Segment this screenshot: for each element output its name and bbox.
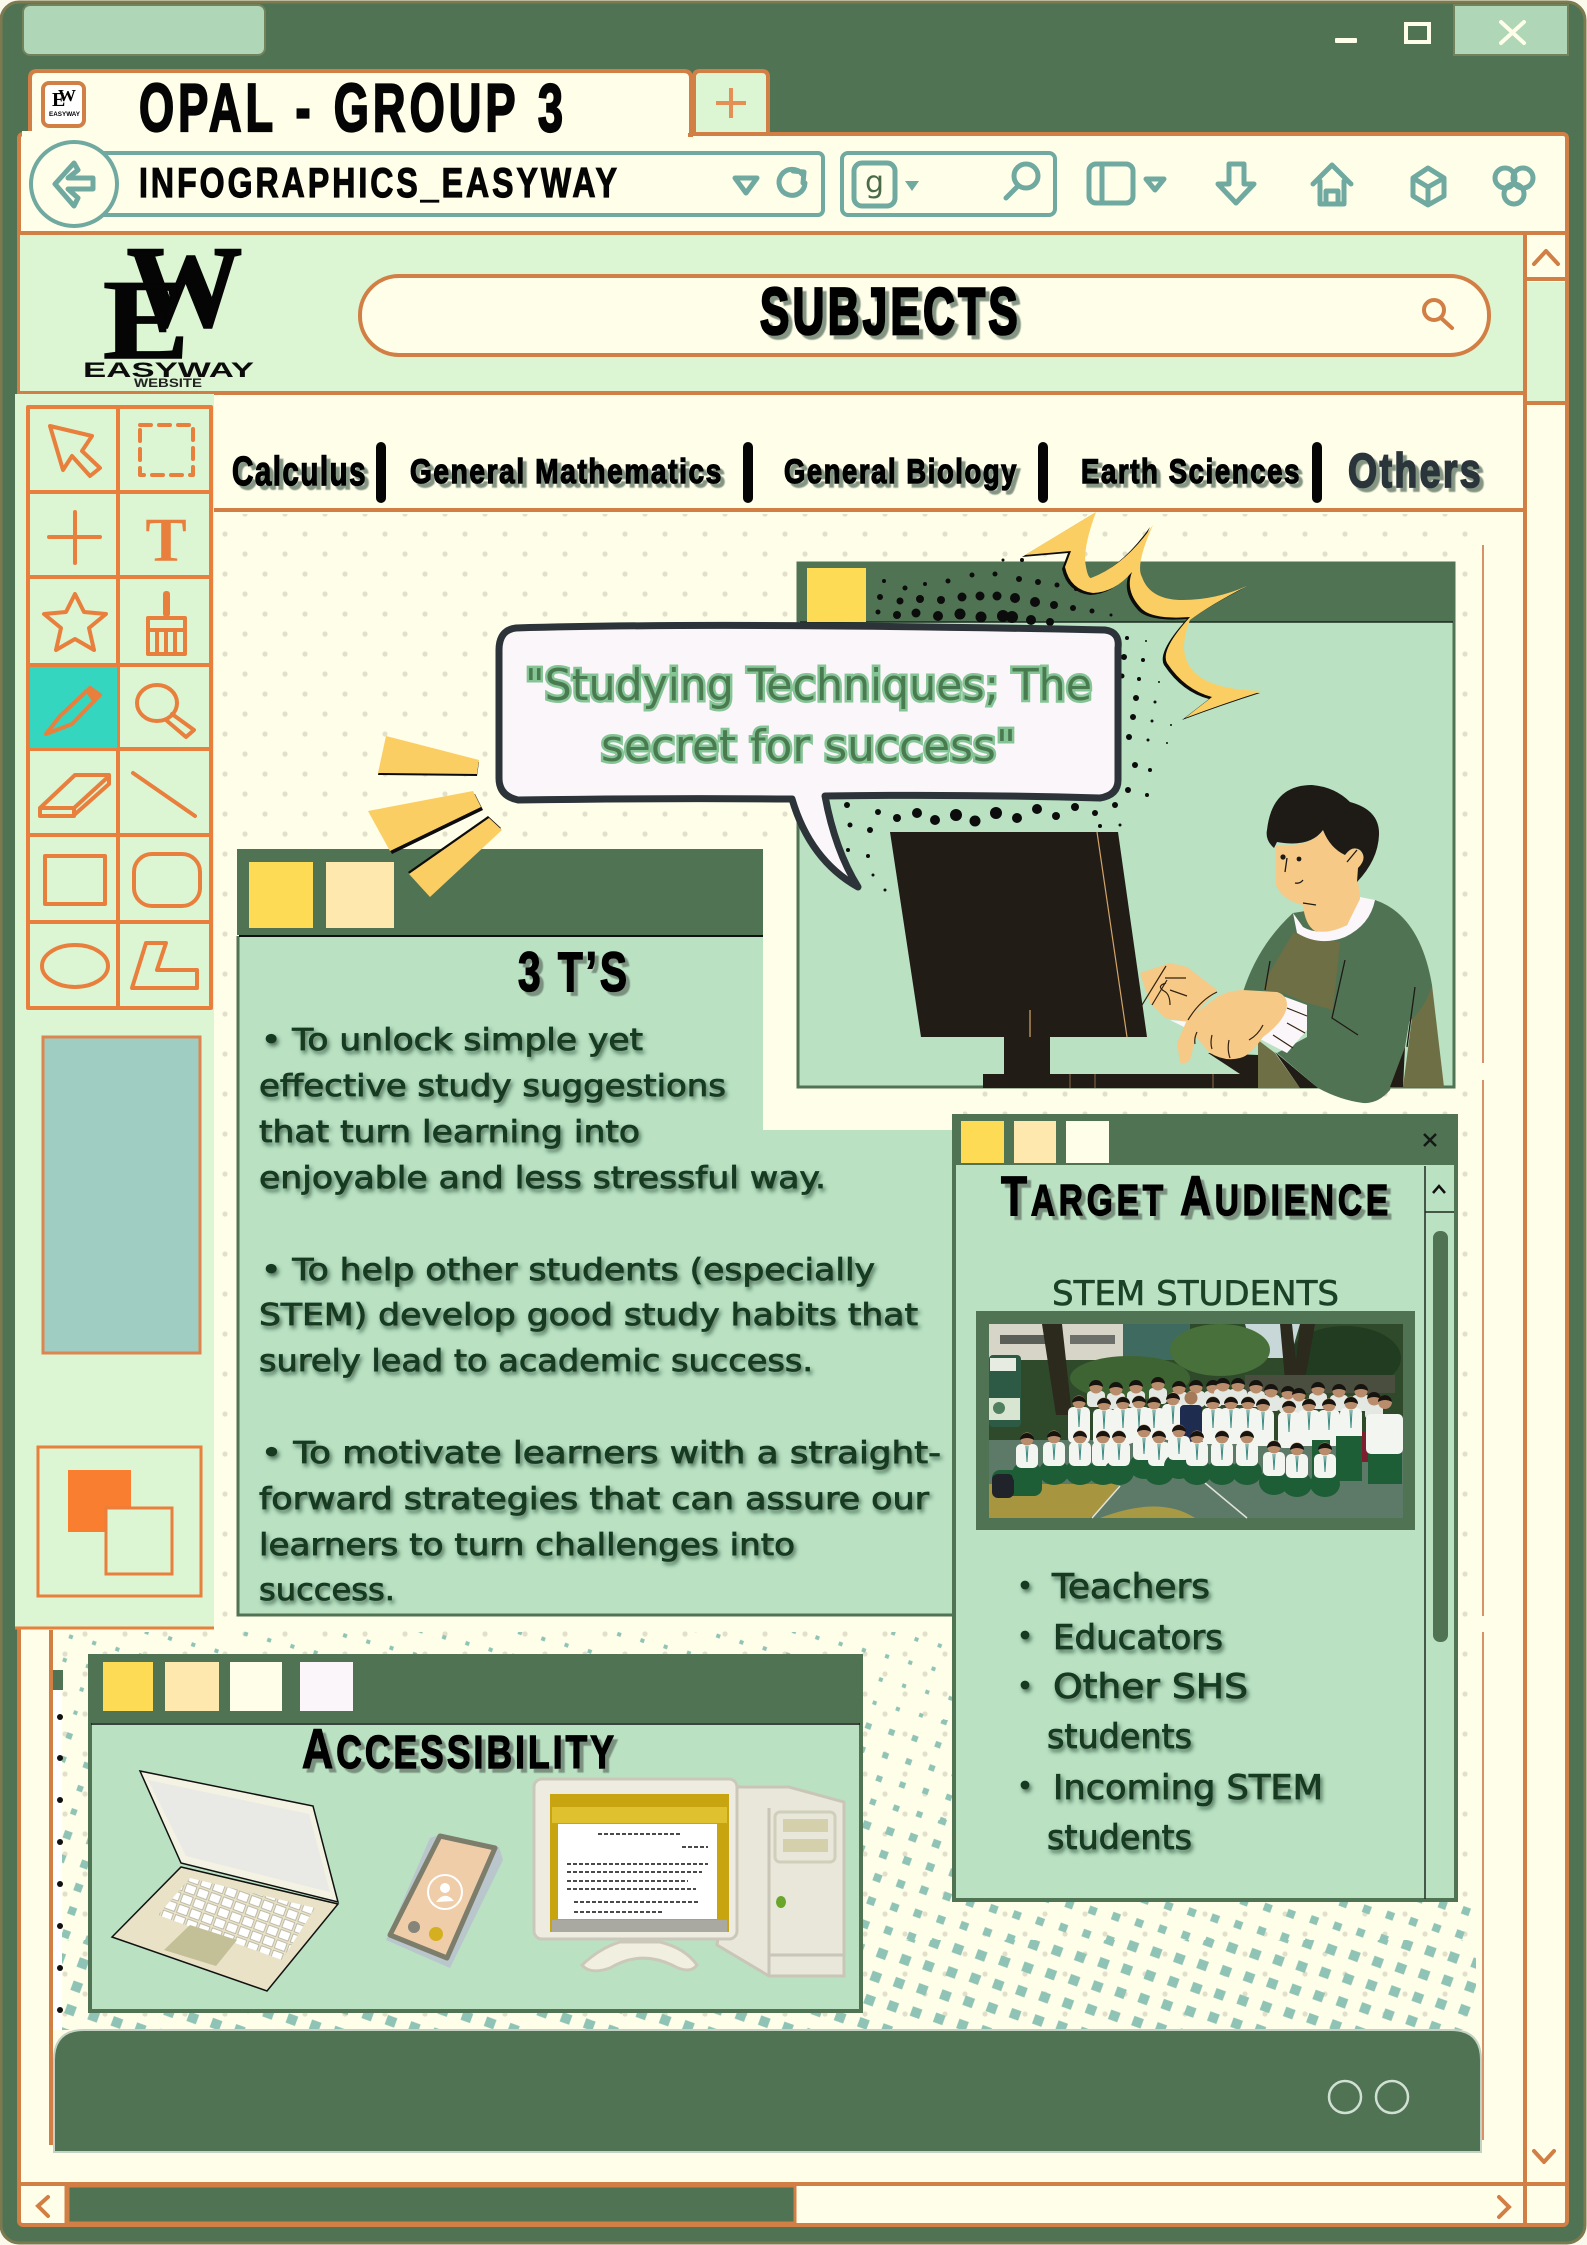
nav: general mathematics: General Mathematics (410, 453, 723, 491)
subject navigation (214, 442, 1525, 510)
scroll down arrow (1534, 2151, 1554, 2162)
icon: crosshair (49, 512, 100, 563)
audience list (1021, 1567, 1323, 1858)
logo: EASYWAY (83, 359, 254, 382)
icon: magnifier (137, 685, 194, 737)
search engine box: g (865, 165, 884, 200)
scroll left arrow (38, 2197, 48, 2216)
favicon (43, 83, 84, 126)
sidebar icon (1089, 164, 1164, 203)
patterned content background (51, 514, 1483, 2145)
logo: W (127, 224, 242, 352)
favicon: W (58, 86, 76, 105)
address bar (31, 142, 823, 226)
icon: L polygon (132, 943, 197, 988)
student standing at right (1366, 1395, 1403, 1484)
minimize button (1335, 38, 1357, 43)
logo: E (103, 256, 189, 383)
icon: rounded rectangle (134, 854, 200, 906)
logo: WEBSITE (134, 376, 202, 390)
panel: computer user window (798, 558, 1454, 1103)
icon: text tool: T (145, 507, 187, 575)
yellow accent wedges (368, 736, 502, 897)
footer bar (54, 2030, 1481, 2152)
heading: subjects: SUBJECTS (760, 274, 1021, 348)
search bar (360, 274, 1489, 355)
nav: earth sciences: Earth Sciences (1081, 453, 1301, 491)
maximize button (1406, 24, 1429, 42)
heading: 3 T's: 3 T’S (518, 940, 630, 1003)
cream area between windows (763, 849, 963, 1134)
foreground and background colours (38, 1447, 201, 1596)
top left title button (23, 5, 265, 55)
toolbar icons (1089, 164, 1533, 205)
tool panel (15, 394, 214, 1628)
yellow burst top right (1022, 512, 1263, 720)
icon: eraser (40, 775, 109, 816)
active tool highlight (30, 667, 117, 748)
heading: accessibility: ACCESSIBILITY (302, 1717, 617, 1780)
students back row (1087, 1377, 1383, 1419)
window buttons (961, 1121, 1109, 1163)
close button (1454, 5, 1568, 55)
body text: enjoyable and less stressful way. (259, 1161, 826, 1196)
bubble quote text: secret for success" (601, 721, 1016, 772)
bubble quote text: "Studying Techniques; The (525, 660, 1092, 711)
audience list: students (1047, 1717, 1192, 1757)
illustration: desktop computer (534, 1779, 844, 1976)
favicon: EASYWAY (49, 112, 80, 118)
home icon (1313, 165, 1351, 204)
body text: that turn learning into (259, 1115, 640, 1150)
dropdown triangle (735, 178, 757, 193)
icon: arrow (50, 426, 100, 476)
icon: star (44, 594, 106, 650)
icon: marquee (140, 425, 193, 475)
illustration: laptop (112, 1771, 338, 1991)
body text: • To unlock simple yet (261, 1023, 643, 1058)
back button (31, 142, 117, 226)
audience list: Teachers (1051, 1567, 1210, 1607)
icon: ellipse (42, 945, 108, 987)
body text: • To help other students (especially (261, 1253, 875, 1288)
logo (83, 224, 254, 390)
scrollbar (1425, 1166, 1454, 1899)
body text: • To motivate learners with a straight- (261, 1436, 941, 1471)
new tab button (694, 71, 768, 134)
panel: target audience (953, 1115, 1456, 1900)
nav: calculus: Calculus (232, 448, 367, 494)
icon: pencil (46, 687, 100, 734)
window buttons (249, 862, 394, 928)
colour swatch panel (43, 1037, 200, 1353)
body text: effective study suggestions (259, 1069, 726, 1104)
students front row (992, 1424, 1340, 1498)
students middle row (1068, 1392, 1403, 1484)
tool grid (28, 407, 211, 1008)
scroll right arrow (1499, 2197, 1509, 2217)
title bar (23, 5, 1568, 55)
illustration: monitor (890, 832, 1275, 1088)
horizontal scrollbar (18, 2184, 1566, 2224)
bubble quote text (525, 660, 1092, 772)
speech bubble (499, 625, 1118, 887)
browser tab (22, 70, 691, 146)
photo background (989, 1324, 1403, 1518)
panel: 3 T's (237, 849, 955, 1615)
search icon (1424, 300, 1452, 328)
nav: others: Others (1348, 445, 1483, 498)
body text: forward strategies that can assure our (259, 1482, 930, 1517)
audience list: students (1047, 1818, 1192, 1858)
refresh icon (779, 169, 805, 195)
nav: general biology: General Biology (784, 453, 1018, 491)
audience list: Educators (1053, 1618, 1223, 1658)
heading: target audience: TARGET AUDIENCE (1001, 1164, 1392, 1227)
body text (259, 1023, 941, 1608)
favicon: E (52, 89, 65, 111)
close icon (1424, 1134, 1436, 1146)
panel: accessibility (89, 1655, 862, 2011)
icon: line (133, 773, 195, 816)
download icon (1218, 164, 1254, 203)
pagination dots (1329, 2081, 1408, 2113)
audience list: Other SHS (1053, 1667, 1248, 1707)
icon: brush (148, 591, 185, 654)
halftone dots (844, 558, 1172, 892)
body text: STEM) develop good study habits that (259, 1298, 918, 1333)
tab title: OPAL - GROUP 3 (139, 70, 567, 146)
website header band (18, 233, 1566, 394)
audience list: Incoming STEM (1053, 1768, 1323, 1808)
search engine box (842, 153, 1055, 215)
body text: learners to turn challenges into (259, 1528, 795, 1563)
URL text: INFOGRAPHICS_EASYWAY (139, 159, 620, 206)
group photo (976, 1311, 1415, 1530)
scroll up arrow (1534, 251, 1558, 264)
window buttons (103, 1662, 353, 1711)
subheading: stem students: STEM STUDENTS (1052, 1274, 1339, 1314)
body text: surely lead to academic success. (259, 1344, 813, 1379)
cube icon (1413, 168, 1444, 205)
body text: success. (259, 1573, 395, 1608)
icon: rectangle (45, 856, 105, 904)
vertical scrollbar (1525, 234, 1566, 2225)
illustration: person at desk (1140, 785, 1444, 1103)
extensions icon (1495, 168, 1533, 204)
illustration: phone (386, 1834, 503, 1968)
